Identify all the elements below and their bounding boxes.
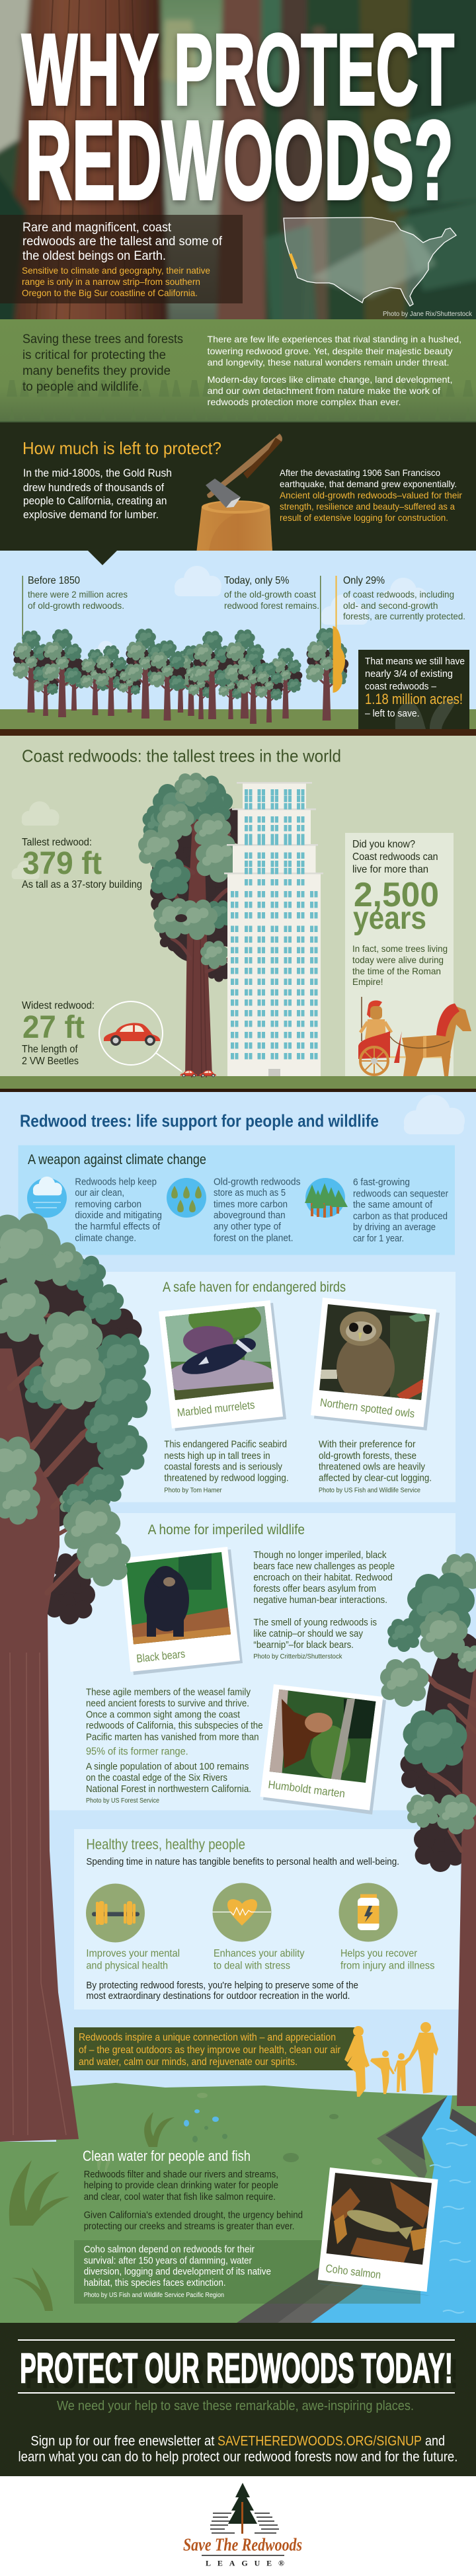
title [22, 13, 454, 223]
text: air: removing carbon [75, 1198, 141, 1210]
text: humboldt marten: National Forest in northwestern California. [86, 1783, 251, 1795]
intro text panel: Oregon to the Big Sur coastline of California. [22, 288, 198, 298]
text: clean water: helping to provide clean drinking water for people [84, 2180, 278, 2191]
panel: coho salmon survival [74, 2240, 420, 2304]
text: black bears: Photo by Critterbiz/Shutterstock [253, 1653, 342, 1660]
text: preserving destinations [86, 1980, 358, 2002]
text: preserving destinations: By protecting redwood forests, you're helping to preserve some of the [86, 1980, 358, 1991]
photo credit: Photo by Jane Rix/Shutterstock [383, 311, 473, 318]
callout: acres left: That means we still have [365, 656, 465, 667]
intro statement: is critical for protecting the [22, 348, 166, 362]
text: black bears: The smell of young redwoods is [253, 1617, 377, 1628]
intro body text: and our own detachment from nature make the work of [208, 385, 440, 396]
photo card: black bears: Black bears [136, 1647, 186, 1665]
heading: life support [20, 1095, 465, 1134]
text: spotted owls: With their preference for [319, 1439, 415, 1450]
text: black bears: “bearnip”–for black bears. [253, 1639, 354, 1651]
text: carbon: store as much as 5 [214, 1187, 286, 1198]
illustration: Roman chariot [358, 997, 471, 1076]
signup text: Sign up for our free enewsletter at [30, 2434, 215, 2448]
panel: did you know: Empire! [352, 976, 383, 987]
text: clean water: protecting our creeks and streams is greater than ever. [84, 2221, 294, 2232]
text: spotted owls: affected by clear-cut logging. [319, 1473, 432, 1484]
text: health intro: Spending time in nature has tangible benefits to personal health and well-being. [86, 1856, 399, 1867]
text: air: Redwoods help keep [75, 1177, 157, 1187]
text: black bears: forests offer bears asylum from [253, 1583, 376, 1594]
text: black bears: negative human-bear interactions. [253, 1594, 387, 1606]
text: marbled murrelets: coastal forests and is seriously [164, 1462, 282, 1473]
panel: did you know [345, 833, 454, 1076]
earthquake text [280, 467, 462, 523]
gold rush text: In the mid-1800s, the Gold Rush [23, 467, 172, 479]
intro body text: Modern-day forces like climate change, land development, [208, 374, 452, 385]
stat: tallest redwood: 379 ft [22, 846, 102, 881]
marker lines [22, 576, 337, 642]
intro text panel: the oldest beings on Earth. [22, 249, 166, 263]
text: humboldt marten: A single population of about 100 remains [86, 1761, 249, 1772]
panel: call to action [0, 2323, 476, 2476]
photo card: humboldt marten: Humboldt marten [268, 1778, 346, 1800]
text: health benefits [86, 1948, 434, 1972]
text: black bears: Though no longer imperiled, black [253, 1549, 387, 1561]
text: carbon: times more carbon [214, 1198, 288, 1210]
hero photo background [0, 0, 476, 332]
text: only 29%: of coast redwoods, including [343, 589, 454, 600]
text: marbled murrelets [164, 1439, 289, 1494]
photo card: northern spotted owls [311, 1298, 440, 1430]
icon: cloud and water [27, 1177, 67, 1218]
intro text panel: redwoods are the tallest and some of [22, 235, 223, 249]
text: clean water: Clean water for people and fish [83, 2148, 251, 2164]
intro body text: There are few life experiences that rival standing in a hushed, [208, 334, 461, 344]
text: marbled murrelets: Photo by Tom Hamer [164, 1486, 222, 1494]
text: black bears: like catnip–or should we say [253, 1628, 363, 1639]
text: today only 5%: redwood forest remains. [224, 600, 319, 611]
heading: imperiled wildlife: A home for imperiled wildlife [148, 1522, 305, 1538]
map of the United States with redwood range [284, 217, 456, 306]
text: humboldt marten: Photo by US Forest Service [86, 1797, 159, 1805]
panel: did you know: Did you know? [352, 839, 415, 850]
panel: a weapon against climate change [19, 1145, 455, 1255]
photo card: marbled murrelets [159, 1299, 286, 1431]
text: humboldt marten: Once a common sight among the coast [86, 1709, 241, 1721]
panel: did you know: Coast redwoods can [352, 851, 438, 863]
ground and stream [0, 2083, 476, 2323]
text: health benefits: and physical health [86, 1961, 168, 1972]
intro body text: towering redwood grove. Yet, despite their majestic beauty [208, 346, 452, 356]
callout: unique connection [74, 2027, 357, 2070]
heading: healthy trees: Healthy trees, healthy people [86, 1836, 245, 1852]
icon: family silhouette [344, 2022, 438, 2097]
text: carbon: forest on the planet. [214, 1232, 294, 1244]
panel: did you know: live for more than [352, 864, 428, 875]
text: carbon: Old-growth redwoods [214, 1177, 300, 1187]
intro statement: many benefits they provide [22, 364, 171, 378]
panel: tallest trees in the world [0, 736, 476, 1092]
panel: footer [0, 2476, 476, 2576]
text: before 1850: of old-growth redwoods. [28, 600, 124, 611]
text: black bears: encroach on their habitat. Redwood [253, 1572, 393, 1583]
text: health benefits: Enhances your ability [214, 1948, 304, 1959]
gold rush text [23, 467, 172, 521]
photo card: humboldt marten [260, 1684, 386, 1815]
text: air: our air clean, [75, 1187, 124, 1198]
text: sequester: redwoods can sequester [353, 1188, 448, 1199]
panel: a home for imperiled wildlife [46, 1513, 456, 1811]
stat: widest redwood: Widest redwood: [22, 1000, 95, 1011]
panel: coho salmon survival: diversion, logging and development of its native [84, 2266, 271, 2277]
illustration: tallest redwood [138, 773, 248, 1077]
stat: tallest redwood: Tallest redwood: [22, 837, 92, 848]
text: health benefits: Improves your mental [86, 1948, 180, 1959]
text: marbled murrelets: threatened by redwood logging. [164, 1473, 289, 1484]
gold rush text: explosive demand for lumber. [23, 508, 159, 521]
gold rush text: people to California, creating an [23, 494, 167, 507]
chart: forest of old-growth trees [13, 628, 348, 724]
callout: acres left: – left to save. [365, 708, 419, 719]
icon: dumbbell [86, 1884, 145, 1942]
intro statement: Saving these trees and forests [22, 332, 183, 346]
panel: a safe haven for endangered birds [73, 1272, 456, 1502]
text: sequester: carbon as that produced [353, 1210, 448, 1222]
panel: did you know: the time of the Roman [352, 966, 441, 976]
text: humboldt marten [86, 1687, 263, 1805]
signup text: and [425, 2434, 445, 2448]
text: clean water: Redwoods filter and shade our rivers and streams, [84, 2169, 278, 2180]
earthquake text: Ancient old-growth redwoods–valued for their [280, 490, 462, 500]
callout: unique connection: Redwoods inspire a unique connection with – and appreciation [79, 2032, 336, 2043]
intro statement: to people and wildlife. [22, 380, 142, 394]
text: clean water [83, 2148, 303, 2232]
icon: supplement bottle [338, 1883, 398, 1942]
intro text panel [0, 215, 243, 303]
intro text panel: range is only in a narrow strip–from southern [22, 276, 200, 287]
panel: coho salmon survival: Photo by US Fish and Wildlife Service Pacific Region [84, 2292, 224, 2299]
text: before 1850: Before 1850 [28, 575, 80, 586]
panel: coho salmon survival: Coho salmon depend on redwoods for their [84, 2244, 255, 2255]
text: marbled murrelets: This endangered Pacific seabird [164, 1439, 287, 1450]
text: only 29%: old- and second-growth [343, 600, 438, 611]
text: spotted owls: Photo by US Fish and Wildlife Service [319, 1486, 420, 1494]
gold rush text: drew hundreds of thousands of [23, 481, 164, 494]
text: humboldt marten: These agile members of the weasel family [86, 1687, 251, 1698]
text: air: dioxide and mitigating [75, 1210, 162, 1221]
heading: Coast redwoods: the tallest trees in the world [22, 746, 341, 765]
stat: widest redwood: The length of [22, 1044, 78, 1055]
text: humboldt marten: need ancient forests to survive and thrive. [86, 1698, 249, 1709]
text: humboldt marten: redwoods of California, this subspecies of the [86, 1720, 263, 1731]
text: spotted owls: threatened owls are heavily [319, 1462, 425, 1473]
logo: Save the Redwoods League: Save The Redwoods [183, 2535, 302, 2555]
text: humboldt marten: 95% of its former range. [86, 1746, 188, 1758]
text: clean water: Given California's extended drought, the urgency behind [84, 2209, 303, 2221]
stat: tallest redwood [22, 837, 142, 890]
photo card: marbled murrelets: Marbled murrelets [177, 1399, 255, 1419]
text: sequester: car for 1 year. [353, 1233, 404, 1244]
illustration: left redwood tree [0, 1213, 151, 2142]
panel: did you know: 2,500 [354, 876, 439, 914]
text: carbon [214, 1177, 300, 1244]
stat: widest redwood [22, 1000, 95, 1067]
panel: how much is left [0, 422, 476, 551]
icon: stump and axe [197, 434, 282, 551]
callout: acres left [358, 650, 469, 729]
text: only 29%: Only 29% [343, 575, 385, 586]
text: air: the harmful effects of [75, 1221, 161, 1232]
signup text: SAVETHEREDWOODS.ORG/SIGNUP [218, 2434, 422, 2448]
text: sequester: the same amount of [353, 1199, 433, 1210]
panel: life support background [0, 1092, 476, 2150]
text: humboldt marten: on the coastal edge of the Six Rivers [86, 1772, 227, 1783]
icon: fast-growing trees [305, 1178, 348, 1218]
panel: green intro band [0, 319, 476, 422]
text: air [75, 1177, 162, 1244]
heading: A weapon against climate change [28, 1152, 206, 1167]
protected share of tree in yellow [333, 626, 345, 693]
earthquake text: strength, resilience and beauty–suffered as a [280, 501, 455, 512]
earthquake text: After the devastating 1906 San Francisco [280, 467, 440, 478]
text: marbled murrelets: nests high up in tall trees in [164, 1450, 270, 1462]
icon: carbon drops [167, 1178, 206, 1218]
heading: life support: Redwood trees: life support for people and wildlife [20, 1111, 379, 1130]
photo card: coho salmon [318, 2167, 438, 2296]
intro text panel: Rare and magnificent, coast [22, 221, 172, 235]
text: today only 5%: Today, only 5% [224, 575, 290, 586]
intro body text: redwoods protection more complex than ever. [208, 397, 401, 407]
logo: Save the Redwoods League [183, 2483, 302, 2568]
heading: safe haven: A safe haven for endangered birds [163, 1280, 346, 1295]
text: before 1850 [28, 575, 128, 611]
panel: coho salmon survival: habitat, this species faces extinction. [84, 2277, 226, 2288]
text: spotted owls: old-growth forests, these [319, 1450, 416, 1462]
text: health benefits: to deal with stress [214, 1961, 290, 1972]
subheading: We need your help to save these remarkable, awe-inspiring places. [57, 2399, 414, 2413]
callout: unique connection: of – the great outdoors as they improve our health, clean our air [79, 2045, 341, 2056]
text: carbon: any other type of [214, 1221, 282, 1232]
panel: did you know: years [353, 901, 426, 936]
stat: widest redwood: 2 VW Beetles [22, 1056, 79, 1067]
callout: acres left: nearly 3/4 of existing [365, 668, 453, 680]
text: sequester: by driving an average [353, 1222, 436, 1233]
intro text panel: Sensitive to climate and geography, their native [22, 265, 210, 276]
panel: healthy trees healthy people [74, 1829, 460, 2010]
text: today only 5%: of the old-growth coast [224, 589, 316, 600]
stat: widest redwood: 27 ft [22, 1010, 85, 1045]
heading: How much is left to protect? [22, 438, 221, 458]
photo card: coho salmon: Coho salmon [325, 2262, 381, 2281]
photo card: northern spotted owls: Northern spotted owls [319, 1396, 415, 1421]
panel: sky with forest chart [0, 551, 476, 736]
text: humboldt marten: Pacific marten has vanished from more than [86, 1732, 259, 1742]
earthquake text: result of extensive logging for construction. [280, 512, 448, 523]
icon: VW Beetle magnifier [99, 1001, 216, 1077]
text: only 29% [343, 575, 465, 621]
intro body text [208, 334, 461, 407]
text: before 1850: there were 2 million acres [28, 589, 128, 600]
text: only 29%: forests, are currently protected. [343, 611, 465, 621]
text: health benefits: Helps you recover [340, 1948, 418, 1959]
text: clean water: and clear, cool water that fish like salmon require. [84, 2191, 276, 2203]
logo: Save the Redwoods League: LEAGUE® [206, 2559, 284, 2568]
intro statement [22, 332, 183, 394]
panel: coho salmon survival: survival: after 150 years of damming, water [84, 2255, 252, 2266]
panel: did you know: In fact, some trees living [352, 943, 448, 954]
panel: did you know: today were alive during [352, 955, 444, 965]
text: sequester [353, 1177, 448, 1244]
stat: tallest redwood: As tall as a 37-story building [22, 879, 142, 890]
icon: grass and butterflies [9, 2093, 382, 2311]
text: sequester: 6 fast-growing [353, 1177, 410, 1188]
text: health benefits: from injury and illness [340, 1961, 435, 1972]
intro body text: and longevity, these natural wonders remain under threat. [208, 357, 450, 368]
photo card: black bears [120, 1547, 243, 1675]
earthquake text: earthquake, that demand grew exponentially. [280, 479, 457, 489]
illustration: 37-story building [224, 782, 323, 1076]
callout: unique connection: and water, calm our minds, and rejuvenate our spirits. [79, 2056, 298, 2068]
text: black bears [253, 1549, 395, 1660]
signup text [19, 2434, 457, 2465]
text: today only 5% [224, 575, 319, 611]
text: carbon: aboveground than [214, 1210, 286, 1221]
text: air: climate change. [75, 1232, 136, 1244]
icon: heart with pulse [213, 1883, 271, 1942]
illustration: right redwood tree [380, 1553, 476, 2106]
callout: acres left: coast redwoods – [365, 681, 437, 692]
text: preserving destinations: most extraordinary destinations for outdoor recreation in the world. [86, 1990, 350, 2002]
text: spotted owls [319, 1439, 432, 1494]
text: black bears: bears face new challenges as people [253, 1561, 395, 1572]
